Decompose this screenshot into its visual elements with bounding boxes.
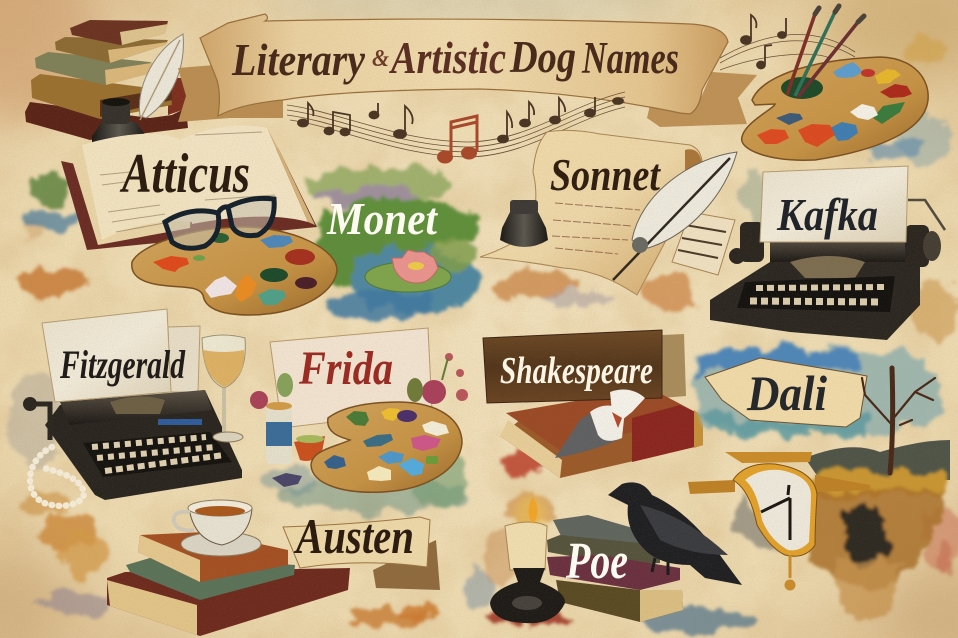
keyboard: [83, 432, 232, 477]
icon: ink bottle and feather: [92, 34, 183, 154]
icon: purple paint smear: [272, 473, 302, 487]
label: Fitzgerald: Fitzgerald: [59, 342, 186, 387]
panel: Austen books, teacup and banner: [107, 500, 440, 636]
label: Dali: Dali: [746, 365, 827, 421]
panel: Sonnet scroll: [480, 130, 737, 295]
title: Names: [581, 33, 679, 83]
title: Literary: [231, 35, 366, 85]
title: &: [372, 46, 389, 72]
title banner: [178, 14, 757, 127]
palette: [311, 402, 462, 492]
books: top-left stack: [25, 20, 188, 140]
panel: Shakespeare sign and books: [483, 330, 703, 478]
watercolor sky: [695, 348, 945, 440]
books: [500, 388, 703, 478]
panel: Atticus book, glasses and palette: [61, 126, 337, 315]
label: Sonnet: Sonnet: [550, 149, 661, 200]
label: Kafka: Kafka: [776, 189, 878, 240]
icon: raven: [608, 482, 742, 585]
icon: wine glass: [202, 335, 245, 442]
icon: quill: [613, 152, 737, 280]
note: [270, 328, 432, 428]
paper: [42, 309, 186, 402]
title: Artistic: [388, 33, 506, 83]
title: Dog: [509, 32, 576, 82]
back book pages: [662, 334, 686, 398]
torn paper: [705, 358, 867, 427]
panel: Kafka typewriter: [710, 166, 945, 340]
label: Monet: Monet: [326, 193, 438, 244]
books: [107, 532, 350, 636]
label: Poe: Poe: [565, 533, 628, 590]
palette: top right: [742, 6, 928, 160]
title: [231, 32, 679, 85]
hills: [805, 440, 950, 480]
banner: [283, 508, 430, 568]
sheet music: [672, 212, 735, 275]
icon: ink bottle: [500, 200, 548, 247]
palette: [132, 227, 337, 315]
paper: [760, 166, 908, 242]
icon: white bird: [555, 390, 645, 458]
label: Frida: Frida: [298, 342, 393, 395]
icon: paint pot: [294, 435, 325, 461]
open book: [61, 126, 317, 250]
icon: teacup: [174, 500, 261, 556]
icon: bare tree: [862, 368, 935, 473]
back paper: [168, 326, 200, 392]
panel: Poe candle, books and raven: [490, 482, 742, 623]
ground and drips: [730, 470, 950, 620]
panel: Dali landscape: [688, 348, 950, 620]
small books: [373, 540, 440, 590]
keyboard: [737, 276, 895, 312]
icon: water lily: [365, 250, 451, 292]
icon: melting clock: [688, 452, 870, 590]
label: Atticus: Atticus: [120, 143, 250, 205]
label: Austen: Austen: [294, 508, 414, 564]
books: [547, 515, 683, 622]
panel: Frida note, flowers and palette: [250, 328, 468, 492]
icon: pearl necklace: [30, 447, 84, 506]
panel: Fitzgerald typewriter: [23, 309, 245, 506]
paint tube: [266, 402, 292, 464]
watercolor: Monet pond: [308, 167, 481, 320]
icon: candle: [490, 495, 565, 623]
label: Shakespeare: Shakespeare: [500, 350, 653, 392]
wooden sign: [483, 330, 662, 403]
flowers: [250, 353, 468, 409]
glasses: [165, 198, 274, 248]
music notes staff: [287, 15, 855, 162]
